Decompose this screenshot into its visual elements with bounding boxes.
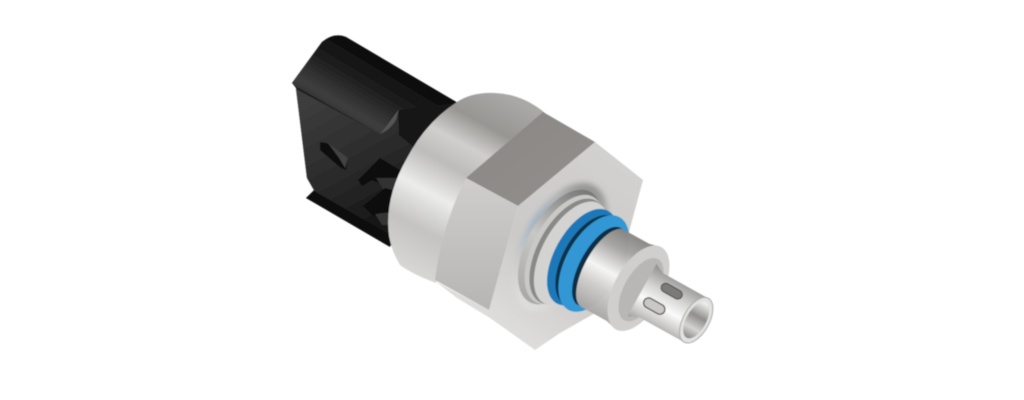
port slots (659, 282, 684, 301)
tube end ring (673, 292, 720, 348)
connector side face (296, 89, 415, 240)
connector top hump (292, 35, 458, 150)
tube bore (678, 298, 715, 343)
connector: black plastic housing (292, 35, 470, 248)
threaded boss (493, 167, 631, 329)
connector bottom flange (306, 191, 392, 247)
hex front face (435, 142, 643, 350)
o-ring: blue seal (532, 197, 644, 323)
hex nut (435, 112, 643, 350)
probe: stepped steel cylinder (564, 218, 682, 341)
hex left face (435, 178, 518, 310)
collar: round steel body (388, 93, 545, 283)
hex top face (466, 112, 595, 206)
tube: sensing tip with ports (627, 264, 722, 353)
connector clip details (358, 158, 403, 190)
connector triangular tab (320, 142, 348, 170)
connector latch ridge (380, 109, 399, 134)
connector right shadow (398, 103, 458, 152)
